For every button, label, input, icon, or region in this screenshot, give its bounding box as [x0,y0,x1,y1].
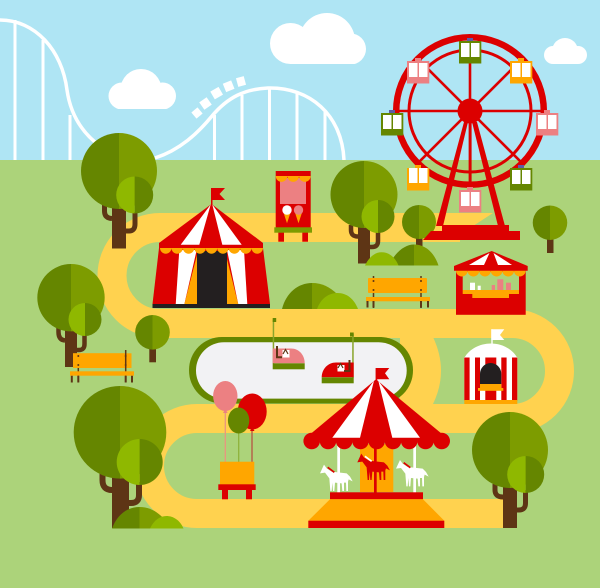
bush centre [282,283,358,309]
snack stand [454,251,528,315]
cabin upper right orange [510,58,532,84]
bumper car pink [273,318,305,369]
tree beside kiosk [330,161,397,264]
bumper car red [322,332,354,383]
tree left middle [37,264,105,367]
sky [0,0,600,160]
cabin right pink [536,110,558,136]
cabin bottom pink [459,187,481,212]
bumper car track [189,337,413,404]
cabin left green [381,110,403,136]
ferris wheel [381,37,558,240]
circus tent [152,188,270,308]
small tree far right [533,206,567,253]
balloon cart [213,381,267,499]
cloud left [108,69,176,110]
ticket booth [464,329,517,404]
cabin lower right green [510,165,532,190]
roller coaster [0,20,344,160]
cloud middle [270,13,366,69]
tree top left [81,133,157,248]
ice cream kiosk [274,171,312,242]
cabin upper left pink [407,58,429,84]
grass [0,160,600,588]
bush lower left [112,507,184,528]
horse white right [396,460,429,486]
cabin top green [459,38,481,64]
bench upper right [366,276,430,308]
cabin lower left orange [407,165,429,190]
bushes by small tree [365,244,438,266]
bench lower left [70,350,134,382]
carousel [303,368,450,528]
small tree centre right [402,205,436,247]
tree lower left [74,386,166,528]
cloud right [544,38,587,64]
horse white left [320,465,353,491]
tree lower right [472,412,548,528]
small tree left centre [135,315,170,362]
yellow winding path [112,213,560,514]
horse red centre [357,454,390,480]
